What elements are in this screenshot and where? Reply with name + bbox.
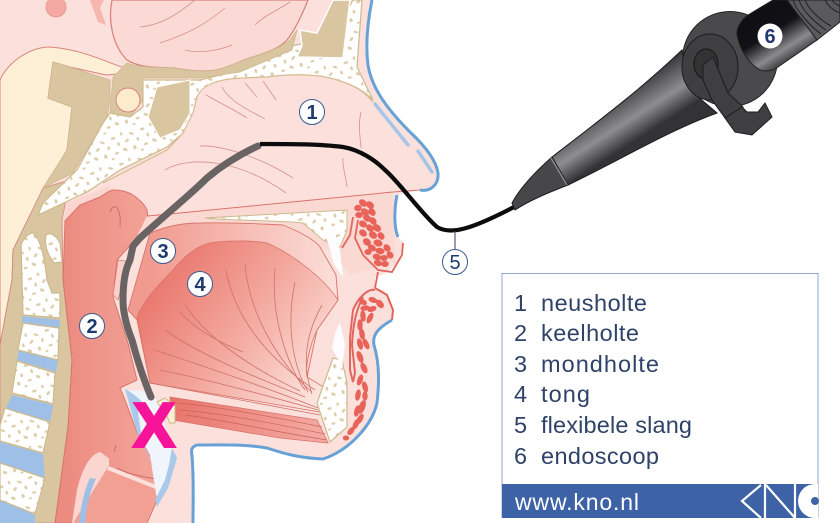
tonsil bbox=[113, 260, 132, 300]
cream bone left bbox=[0, 47, 140, 345]
epiglottis white folds bbox=[125, 390, 172, 500]
number badge 6 bbox=[758, 24, 782, 48]
nasal cavity lines bbox=[165, 81, 361, 193]
number badge 6: 6 bbox=[764, 26, 776, 48]
legend entries: 2 bbox=[514, 320, 527, 346]
tongue bbox=[137, 241, 338, 412]
small ring bbox=[694, 49, 718, 79]
larynx inner line bbox=[114, 445, 156, 479]
website: www.kno.nl bbox=[514, 489, 639, 515]
lower tooth bbox=[332, 323, 345, 367]
frontal sinus bbox=[297, 0, 350, 58]
lower lip contour bbox=[350, 288, 393, 382]
nasal cavity top edge bbox=[103, 75, 373, 183]
pharynx bbox=[55, 190, 160, 523]
floor of mouth muscle bbox=[170, 397, 328, 443]
larynx cartilage bbox=[73, 454, 155, 523]
brainstem details bbox=[90, 0, 106, 25]
legend entries: neusholte bbox=[541, 290, 647, 316]
legend entries: mondholte bbox=[541, 351, 659, 377]
number badge 4: 4 bbox=[194, 274, 206, 296]
number badge 1: 1 bbox=[306, 102, 318, 124]
oral cavity bbox=[128, 223, 338, 410]
legend entries: flexibele slang bbox=[541, 412, 692, 438]
legend entries: tong bbox=[541, 381, 590, 407]
legend entries: 6 bbox=[514, 443, 527, 469]
endoscope bbox=[512, 0, 840, 210]
spinal discs bbox=[0, 316, 60, 523]
control wheel bbox=[682, 12, 778, 106]
vertebral column tan bbox=[0, 180, 72, 523]
brain lobe bbox=[111, 0, 308, 71]
flexible hose bbox=[260, 144, 514, 231]
upper tooth bbox=[325, 227, 343, 277]
uvula contour bbox=[110, 207, 120, 227]
skin outline bbox=[192, 0, 438, 523]
epiglottis blue lower bbox=[155, 448, 177, 507]
legend entries: 5 bbox=[514, 412, 527, 438]
eyepiece grip bbox=[787, 0, 840, 40]
legend entries: 1 bbox=[514, 290, 527, 316]
tapered body bbox=[552, 50, 717, 185]
palate bone bbox=[205, 210, 347, 247]
skin bbox=[0, 0, 438, 523]
larynx upper contour bbox=[73, 453, 108, 523]
number badge 1 bbox=[300, 100, 324, 124]
footer bar bbox=[502, 484, 818, 518]
nose cone bbox=[512, 157, 568, 210]
legend entries: 3 bbox=[514, 351, 527, 377]
KNO logo bbox=[742, 484, 819, 518]
sphenoid sinus bbox=[148, 80, 190, 138]
upper lip contour bbox=[342, 217, 403, 288]
inner disc bbox=[682, 34, 738, 100]
epiglottis blue edge bbox=[125, 389, 155, 470]
vertebrae bbox=[0, 233, 62, 514]
palate line bbox=[147, 190, 420, 216]
legend entries: endoscoop bbox=[541, 443, 659, 469]
legend panel bbox=[502, 274, 819, 518]
anatomy: head cross-section bbox=[0, 0, 438, 523]
marker X: X bbox=[133, 392, 175, 460]
number badge 2: 2 bbox=[86, 316, 98, 338]
number badge 5 bbox=[442, 250, 468, 274]
tongue muscle fibres bbox=[150, 265, 322, 415]
nasal cartilage bbox=[375, 104, 432, 172]
occipital bone bbox=[43, 62, 110, 188]
larynx pale band bbox=[108, 468, 156, 487]
legend entries: keelholte bbox=[541, 320, 639, 346]
hyoid bone bbox=[157, 398, 175, 423]
legend entries bbox=[514, 290, 692, 469]
palate mucosa bbox=[125, 192, 395, 275]
number badge 2 bbox=[80, 314, 104, 338]
number badge 5: 5 bbox=[449, 252, 461, 274]
callout line 5 bbox=[454, 231, 456, 250]
number badge 4 bbox=[188, 272, 212, 296]
scope barrel bbox=[737, 0, 817, 71]
number badge 3 bbox=[150, 238, 176, 264]
spongy skull base bbox=[38, 0, 373, 215]
tan band under brain bbox=[110, 30, 297, 117]
number badge 3: 3 bbox=[157, 241, 169, 263]
pituitary bbox=[116, 88, 140, 112]
mandible bbox=[317, 358, 347, 442]
legend entries: 4 bbox=[514, 381, 527, 407]
brain folds bbox=[140, 0, 290, 52]
palate pale wedge bbox=[63, 186, 113, 222]
blood vessel bbox=[46, 0, 66, 17]
floor muscle lines bbox=[178, 403, 327, 440]
nasal cavity bbox=[103, 75, 418, 213]
trachea blue bbox=[79, 478, 96, 523]
hook bbox=[725, 103, 772, 135]
legend frame bbox=[502, 274, 818, 518]
lower lip muscle blobs bbox=[344, 297, 384, 440]
grip ribs bbox=[793, 0, 840, 34]
flexible scope inside body bbox=[123, 146, 258, 397]
collar line bbox=[551, 158, 567, 185]
strap bbox=[703, 57, 743, 118]
upper lip muscle blobs bbox=[355, 199, 394, 266]
